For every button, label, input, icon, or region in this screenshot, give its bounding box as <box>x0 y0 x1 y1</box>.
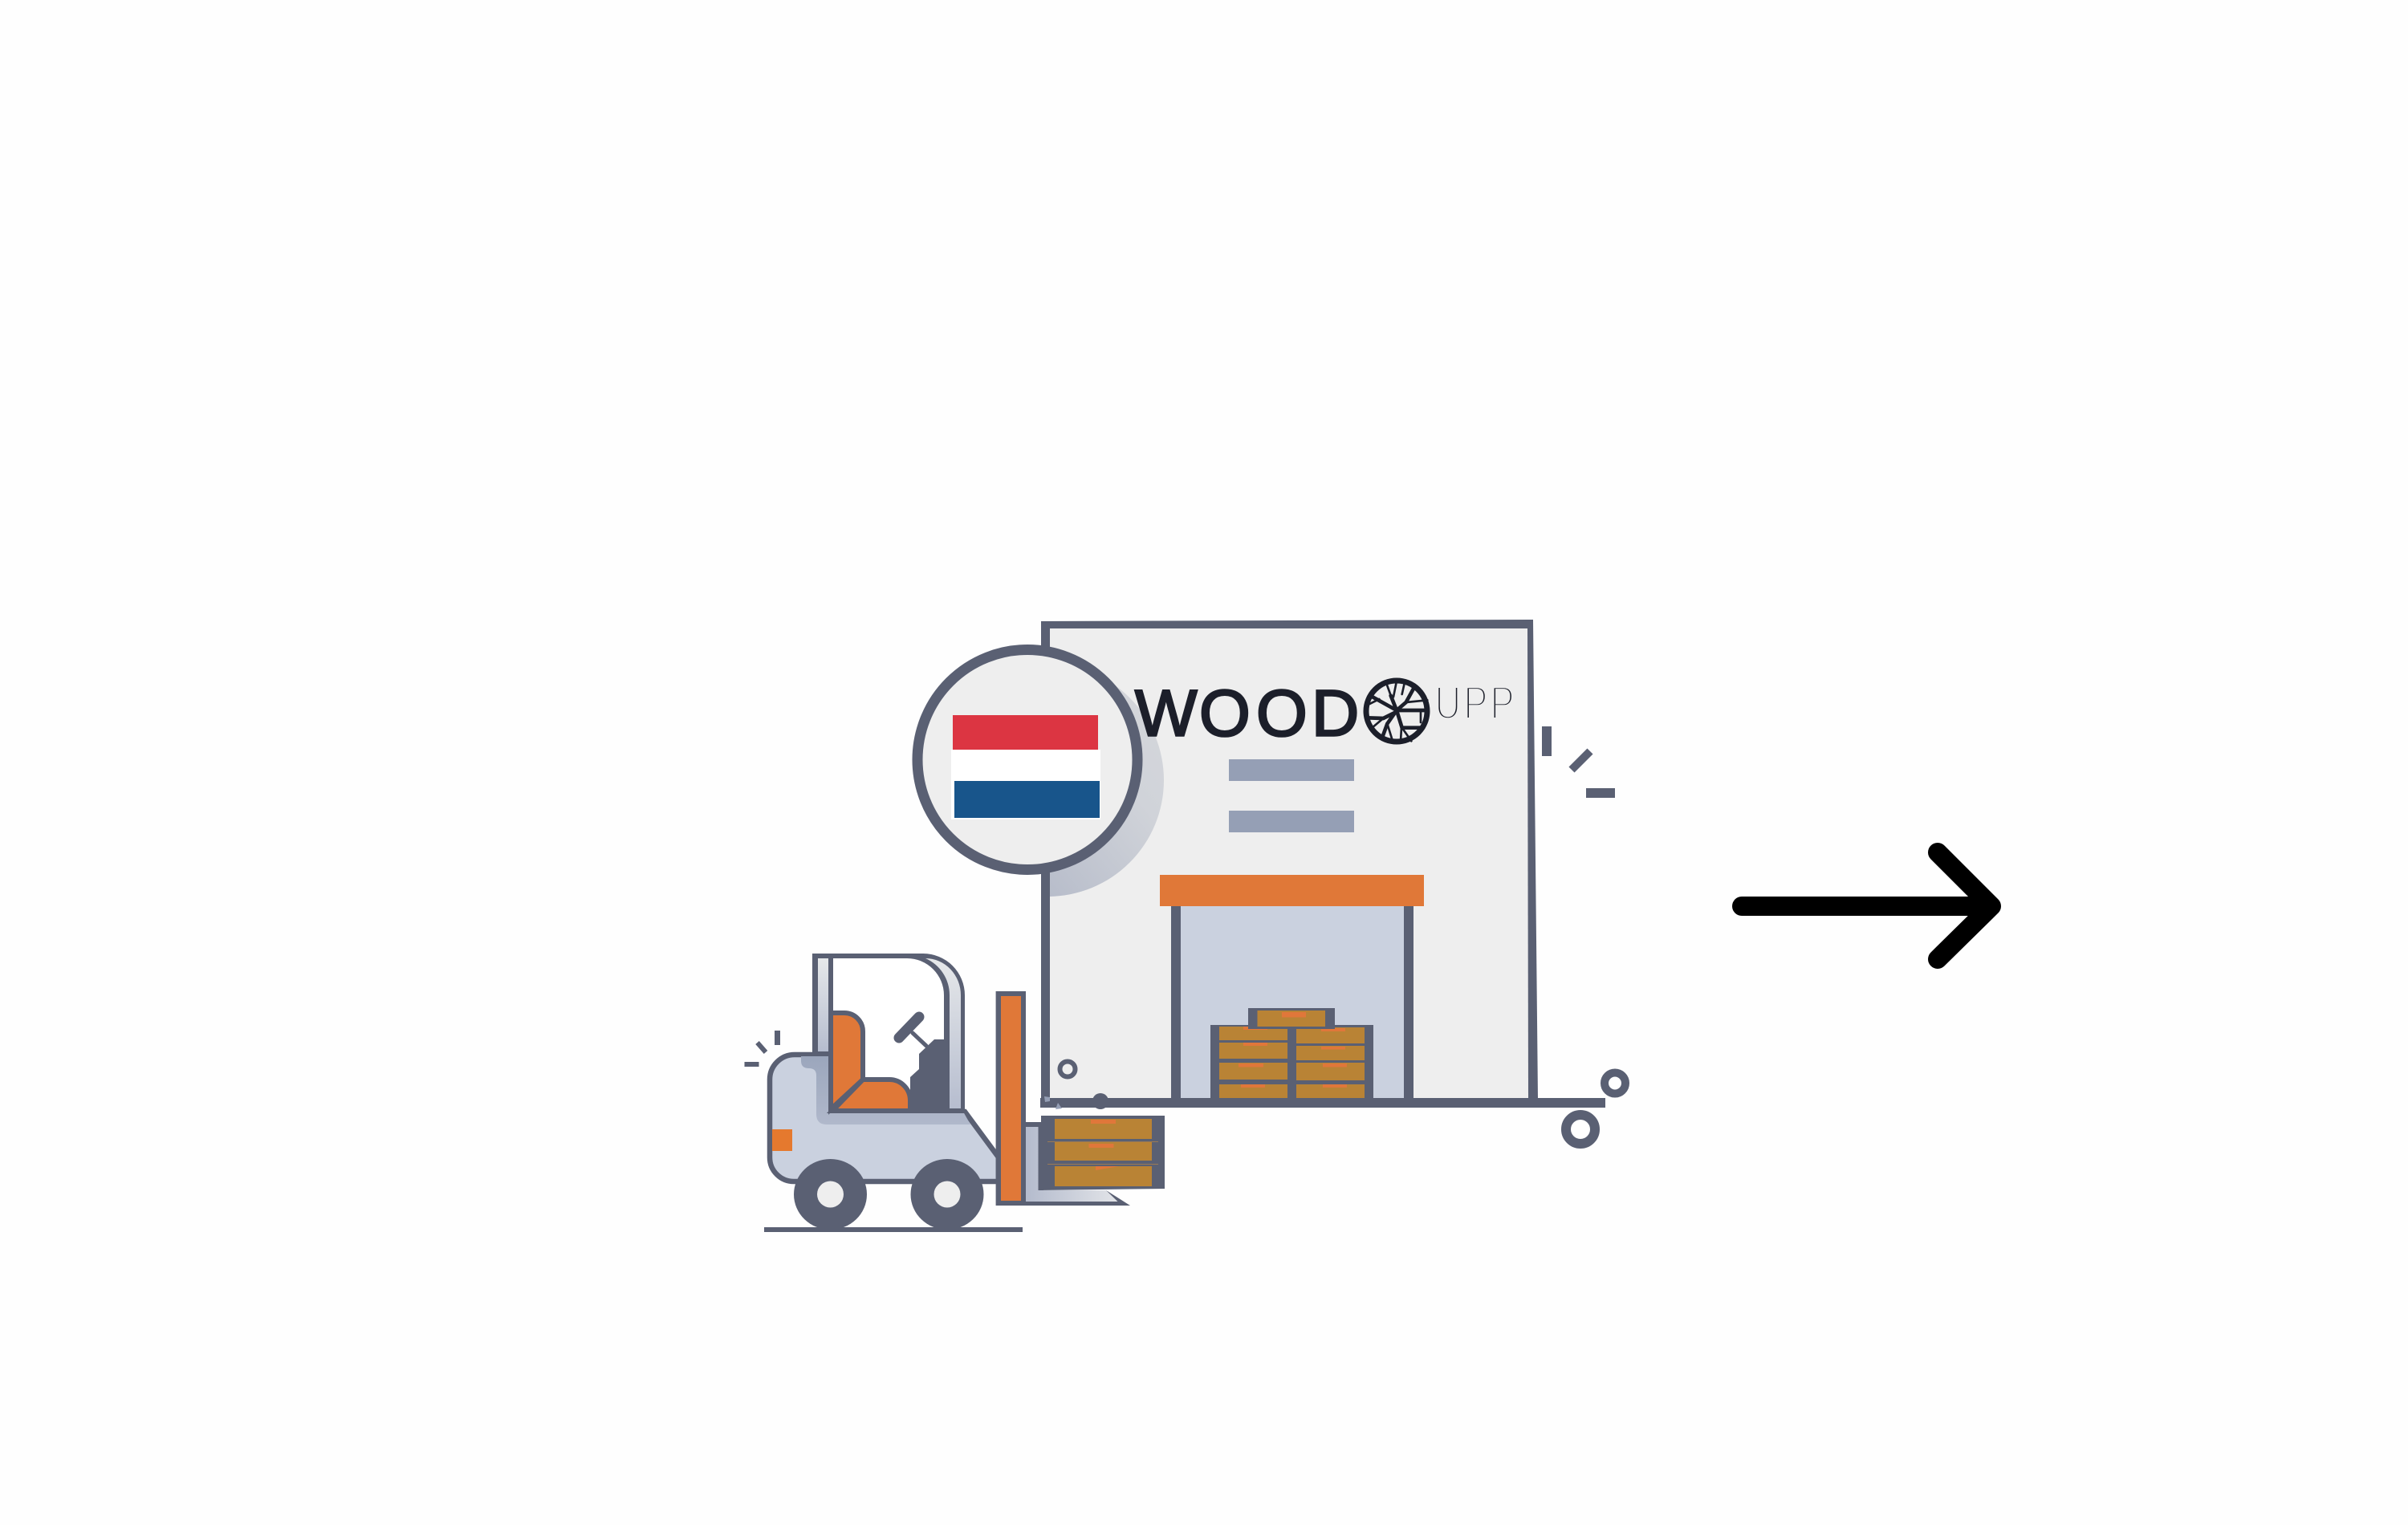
floor line <box>1040 1098 1605 1108</box>
floor bump <box>1092 1093 1108 1109</box>
pallet frame <box>1039 1116 1165 1190</box>
ground line overlay <box>764 1227 1023 1232</box>
pallet tapes <box>1088 1120 1119 1170</box>
badge circle <box>917 650 1137 870</box>
arrow shaft <box>1742 897 1989 916</box>
left column boxes <box>1219 1027 1287 1098</box>
door post: right <box>1404 903 1413 1100</box>
spark: horizontal <box>745 1062 759 1067</box>
fork surface <box>1026 1127 1117 1202</box>
sign bar: upper <box>1229 759 1354 781</box>
mast outer <box>996 991 1026 1206</box>
small ring on wall <box>1060 1061 1076 1077</box>
spark: horizontal <box>1586 788 1615 798</box>
WoodUpp logo <box>1135 677 1515 750</box>
rear wheel <box>794 1159 867 1230</box>
decorative ring: bottom <box>1566 1115 1595 1144</box>
sparkle marks by building <box>1542 726 1615 798</box>
corner marks <box>1044 1096 1062 1109</box>
logo word UPP: UPP <box>1435 677 1515 730</box>
top box <box>1248 1008 1335 1029</box>
cab floor <box>828 1108 965 1113</box>
logo word WOOD: WOOD <box>1135 677 1359 750</box>
door awning <box>1160 875 1424 906</box>
logo tree emblem <box>1366 681 1427 742</box>
flag red stripe <box>953 715 1098 750</box>
right column boxes <box>1296 1027 1365 1098</box>
cab rear post <box>818 958 828 1051</box>
stacked boxes in doorway <box>1210 1008 1373 1098</box>
forklift body <box>770 1055 999 1181</box>
flag blue stripe <box>954 781 1100 818</box>
building wall <box>1041 620 1538 1100</box>
infographic canvas <box>745 620 2001 1232</box>
front wheel <box>910 1159 984 1230</box>
cab front post <box>925 958 961 1109</box>
steering column base <box>910 1039 950 1109</box>
spark: vertical <box>1542 726 1552 756</box>
sign bar: lower <box>1229 811 1354 832</box>
sparkle marks by forklift <box>745 1031 780 1067</box>
fork frame <box>1026 1122 1130 1206</box>
flag white band and border <box>951 750 1100 819</box>
spark: diagonal <box>1572 751 1590 770</box>
box tapes <box>1239 1027 1347 1088</box>
decorative ring: right <box>1605 1072 1625 1093</box>
orange rear light <box>772 1129 792 1151</box>
cab window <box>833 958 944 1109</box>
flag badge shadow <box>1050 686 1164 897</box>
body shading <box>801 1056 970 1124</box>
seat back <box>831 1013 863 1109</box>
steering wheel <box>899 1017 926 1046</box>
mast inner <box>1001 996 1021 1201</box>
flag badge <box>917 650 1137 870</box>
spark: diagonal <box>758 1043 766 1052</box>
stack base <box>1210 1025 1373 1098</box>
warehouse door <box>1176 906 1409 1099</box>
pallet boxes <box>1055 1119 1152 1186</box>
pallet thin lines <box>1047 1141 1158 1165</box>
top box tape <box>1282 1012 1306 1018</box>
arrow head <box>1938 852 1991 959</box>
spark: vertical <box>775 1031 780 1045</box>
warehouse building <box>1040 620 1605 1109</box>
door post: left <box>1171 903 1181 1100</box>
ground line <box>764 1227 1023 1232</box>
seat cushion <box>832 1080 910 1111</box>
top box face <box>1257 1011 1325 1027</box>
forklift <box>764 954 1165 1232</box>
building wall interior <box>1050 628 1528 1098</box>
cab frame <box>812 954 965 1113</box>
arrow pointing right <box>1742 852 1991 959</box>
